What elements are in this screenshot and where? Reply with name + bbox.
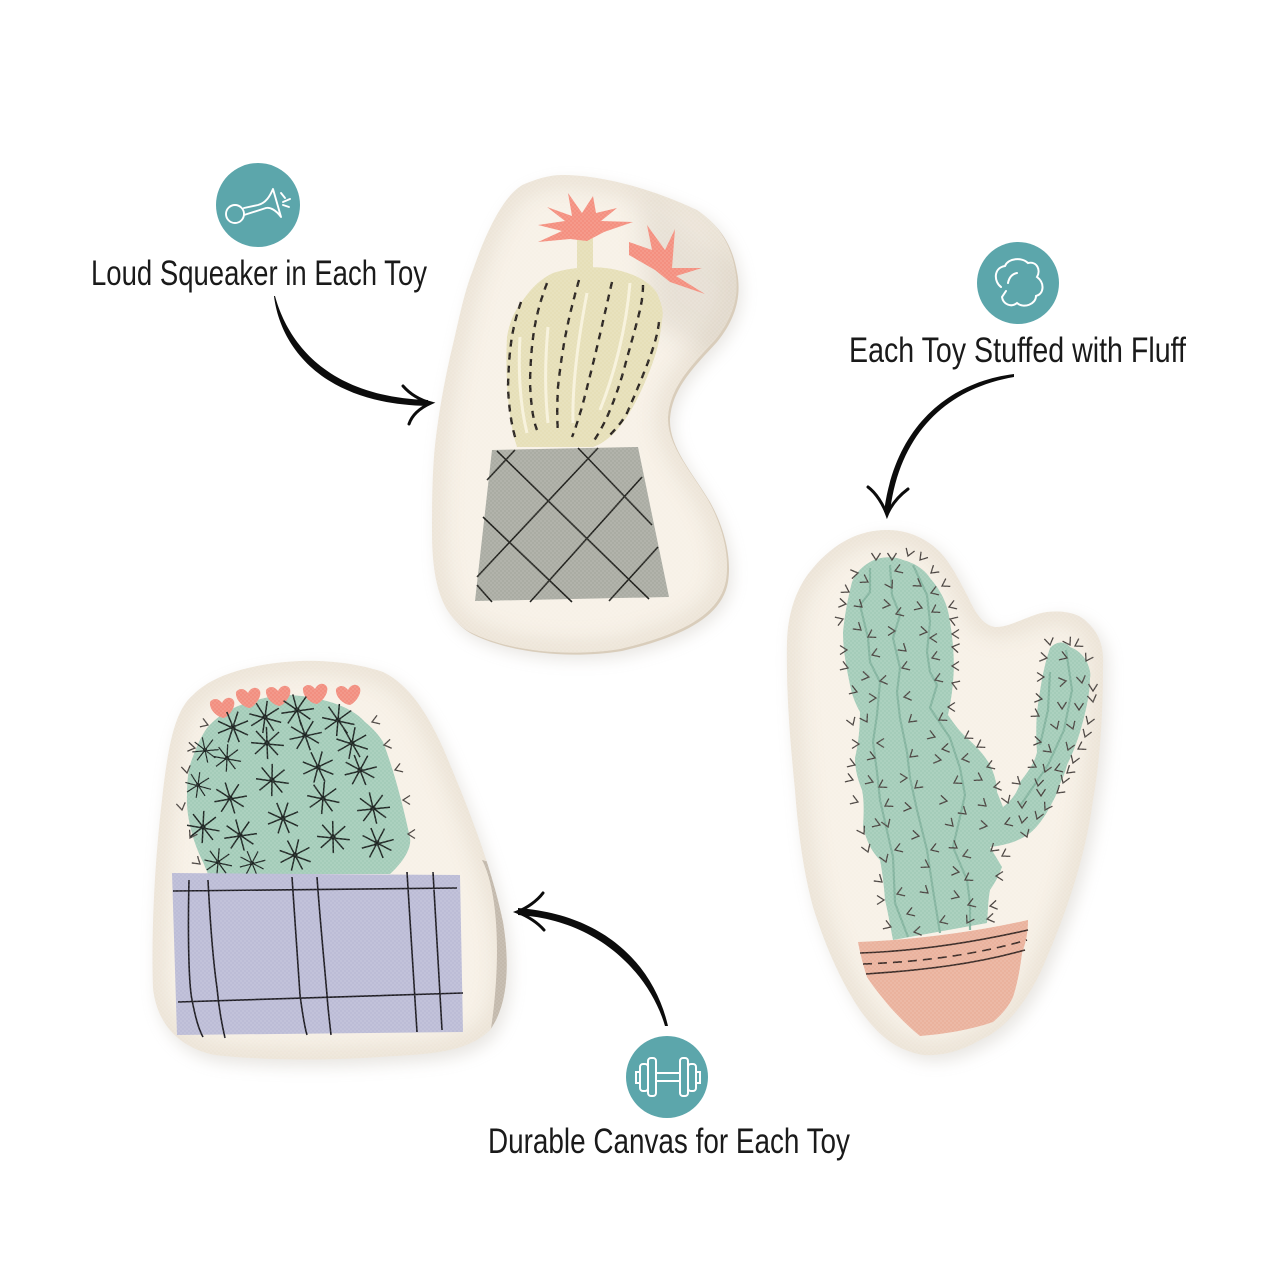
beige back edge [482,860,507,1028]
star spines [176,692,415,879]
toy: yellow flowering cactus [432,175,760,660]
arrow [868,374,1014,515]
terracotta pot [858,920,1028,1036]
label: Durable Canvas for Each Toy [488,1122,850,1161]
lavender pot with plaid [172,872,463,1038]
green cactus body [843,557,1090,940]
coral buds [210,684,360,718]
callout: squeaker [91,163,431,424]
toy: round cactus in lavender pot [152,661,520,1066]
cactus ribs [508,280,659,442]
cactus spines [835,548,1098,936]
green cactus ribs [860,565,1072,937]
icon: horn [216,163,300,247]
callout: canvas [488,893,850,1161]
coral flowers [538,193,705,294]
icon: cotton [977,242,1059,324]
yellow cactus body [506,267,663,447]
label: Each Toy Stuffed with Fluff [849,331,1186,370]
cactus stem [577,238,593,275]
callout: fluff [849,242,1186,515]
arrow [274,296,431,424]
grey pot with lattice [475,447,669,602]
toy: tall green cactus in terracotta pot [787,530,1108,1061]
label: Loud Squeaker in Each Toy [91,254,427,293]
arrow [517,893,668,1026]
icon: dumbbell [626,1036,708,1118]
round green cactus [187,695,410,874]
